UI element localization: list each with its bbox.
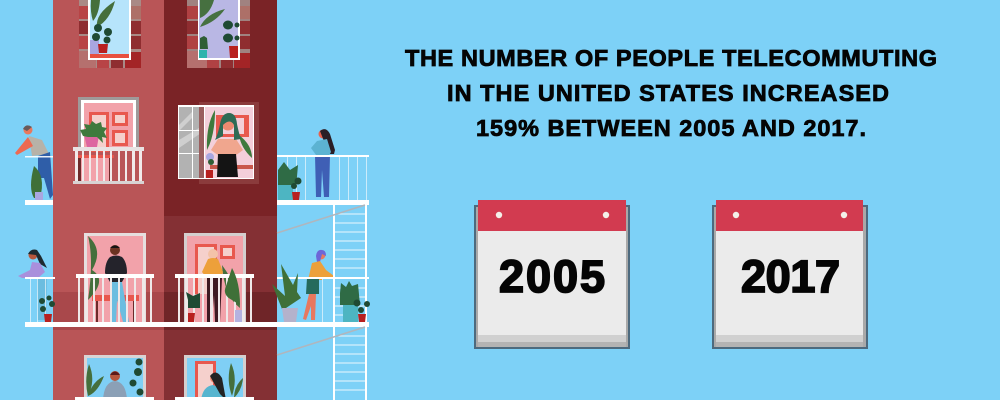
calendar: 2017: 2017	[741, 251, 840, 302]
second floor left window with balcony	[73, 97, 144, 184]
calendar: 2005	[474, 200, 630, 349]
third floor windows	[84, 233, 246, 323]
headline: IN THE UNITED STATES INCREASED	[447, 80, 889, 106]
fire escape structure	[25, 155, 369, 400]
top right window	[187, 0, 250, 68]
headline: THE NUMBER OF PEOPLE TELECOMMUTING	[405, 45, 937, 71]
calendar: 2005: 2005	[499, 251, 605, 302]
right top person standing	[311, 129, 335, 197]
apartment building illustration	[15, 0, 370, 400]
bottom floor windows	[75, 355, 254, 400]
balcony railings	[76, 274, 254, 322]
top left window	[79, 0, 141, 68]
potted plants on balconies	[39, 162, 370, 322]
headline: 159% BETWEEN 2005 AND 2017.	[476, 115, 866, 141]
balcony man	[105, 245, 129, 322]
building facade	[53, 0, 277, 400]
balcony woman in orange	[202, 249, 223, 322]
calendar: 2017	[712, 200, 868, 349]
second floor right window with woman	[178, 102, 259, 184]
headline	[405, 45, 937, 141]
left top person leaning on rail	[15, 125, 53, 200]
left balcony person	[18, 250, 47, 320]
right balcony woman in skirt	[303, 250, 334, 320]
